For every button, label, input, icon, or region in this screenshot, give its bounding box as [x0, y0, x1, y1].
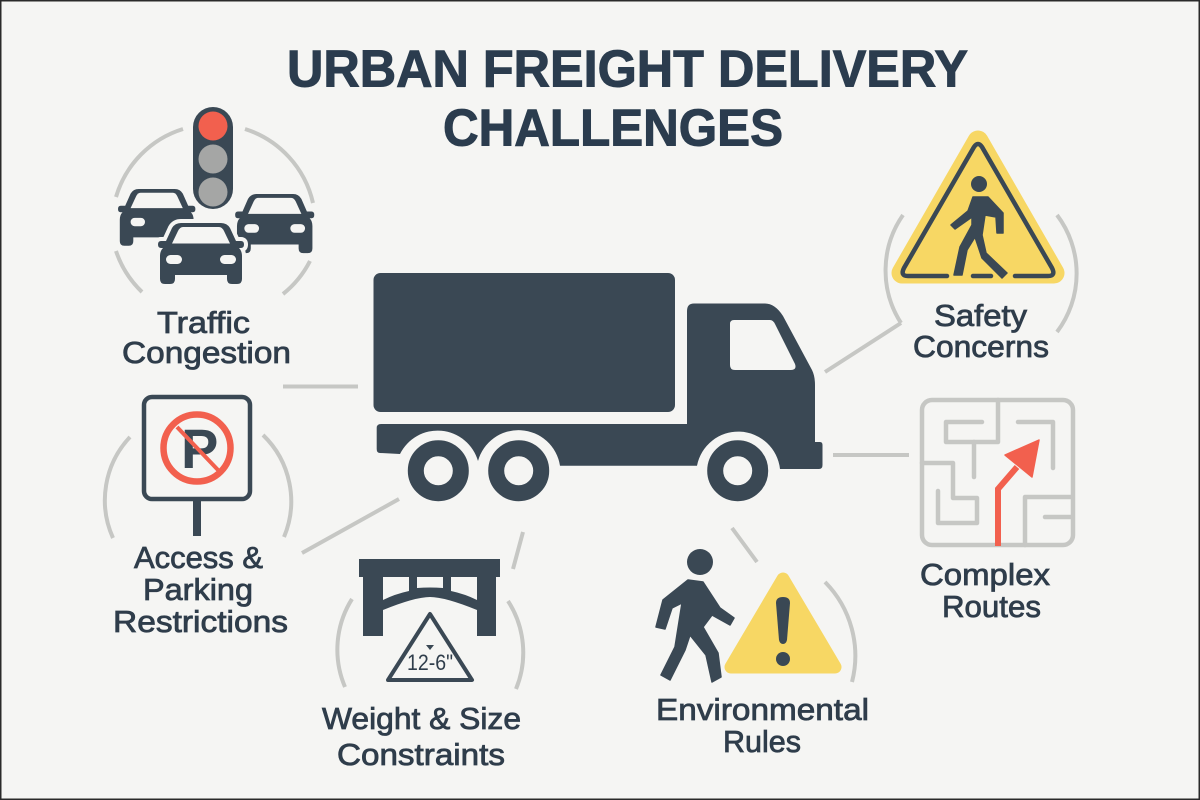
- label: complex routes: Routes: [942, 589, 1041, 624]
- label: weight and size constraints: Weight & Size: [322, 701, 521, 736]
- icon: bridge: [359, 559, 500, 636]
- icon: left car: [118, 189, 195, 246]
- label: safety concerns: Safety: [934, 298, 1028, 333]
- truck cargo box: [374, 273, 675, 412]
- icon: right car: [235, 194, 314, 253]
- panel: access and parking restrictions: [105, 397, 291, 639]
- title: [287, 40, 968, 158]
- icon: walking person: [656, 549, 734, 682]
- label: traffic congestion: Congestion: [122, 335, 291, 370]
- icon: centre car: [158, 223, 244, 284]
- label: environmental rules: [656, 692, 869, 759]
- icon: warning triangle: [731, 579, 835, 667]
- label: complex routes: Complex: [920, 557, 1051, 592]
- panel: complex routes: [920, 400, 1073, 624]
- truck window: [730, 320, 796, 370]
- label: safety concerns: [913, 298, 1049, 364]
- title: URBAN FREIGHT DELIVERY: [287, 40, 968, 98]
- label: access and parking restrictions: [113, 540, 288, 639]
- icon: clearance sign: 12-6": [407, 650, 453, 675]
- icon: no parking sign: P: [181, 417, 218, 480]
- panel: traffic congestion: [116, 107, 314, 370]
- icon: clearance sign: [388, 614, 472, 680]
- title: CHALLENGES: [443, 100, 783, 158]
- label: weight and size constraints: Constraints: [337, 737, 505, 772]
- label: environmental rules: Environmental: [656, 692, 869, 727]
- central truck icon: [374, 273, 822, 493]
- truck cab and chassis: [377, 304, 822, 469]
- connector lines: [283, 323, 909, 569]
- icon arc: [825, 582, 855, 682]
- icon arcs: [105, 435, 291, 538]
- truck wheels: [416, 448, 760, 493]
- icon arcs: [337, 599, 523, 689]
- icon arcs: [886, 215, 1077, 332]
- label: complex routes: [920, 557, 1051, 624]
- icon arcs: [116, 129, 313, 294]
- label: weight and size constraints: [322, 701, 521, 772]
- label: access and parking restrictions: Restrictions: [113, 604, 288, 639]
- icon: pedestrian warning sign: [902, 141, 1054, 278]
- icon: traffic light: [193, 107, 233, 209]
- label: traffic congestion: [122, 305, 291, 370]
- panel: environmental rules: [656, 549, 869, 759]
- icon: no parking sign: [144, 397, 250, 536]
- icon: red route arrow: [998, 440, 1039, 546]
- label: access and parking restrictions: Access &: [134, 540, 263, 575]
- label: environmental rules: Rules: [723, 724, 801, 759]
- label: access and parking restrictions: Parking: [143, 572, 253, 607]
- panel: weight and size constraints: [322, 559, 523, 772]
- label: traffic congestion: Traffic: [157, 305, 250, 340]
- icon: maze: [922, 400, 1073, 545]
- label: safety concerns: Concerns: [913, 329, 1049, 364]
- panel: safety concerns: [886, 141, 1077, 364]
